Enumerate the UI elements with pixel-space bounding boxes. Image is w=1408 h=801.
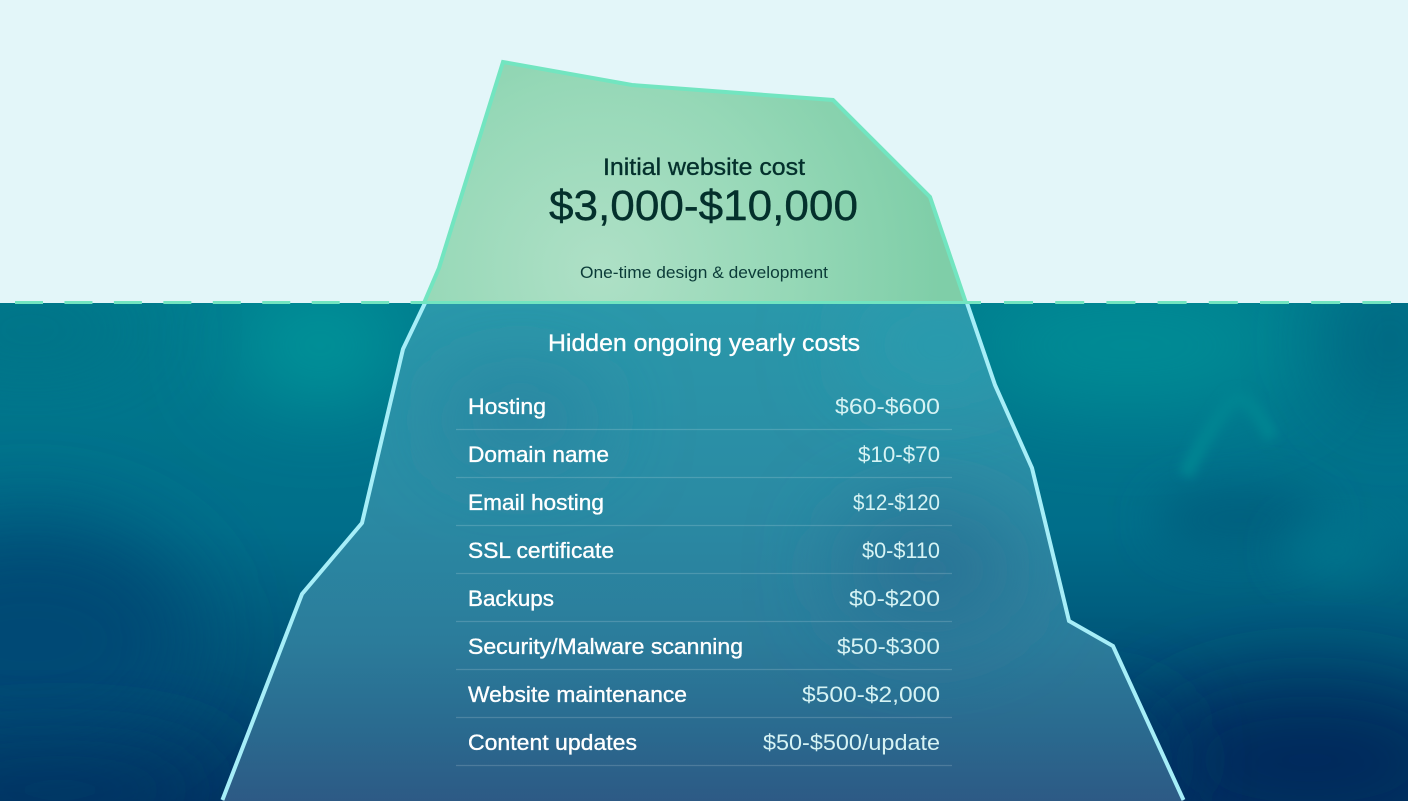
note: one-time cost: One-time design & development: [580, 263, 828, 282]
row: backups: [456, 586, 952, 622]
row: hosting: [456, 394, 952, 430]
sky background: [0, 0, 1408, 303]
row: domain name: Domain name: [468, 442, 609, 467]
iceberg: underwater section: [222, 303, 1184, 801]
row: domain name: [456, 442, 952, 478]
row: ssl certificate: [456, 538, 952, 574]
row: content updates: Content updates: [468, 730, 637, 755]
row: ssl certificate: SSL certificate: [468, 538, 614, 563]
row: security and malware scanning: [456, 634, 952, 670]
price: initial cost range: $3,000-$10,000: [549, 182, 858, 230]
row: security and malware scanning: $50-$300: [837, 634, 940, 659]
row: domain name: $10-$70: [858, 442, 940, 467]
heading: hidden costs: Hidden ongoing yearly costs: [548, 330, 860, 357]
row: website maintenance: $500-$2,000: [802, 682, 940, 707]
row: email hosting: $12-$120: [853, 490, 940, 515]
row: email hosting: Email hosting: [468, 490, 604, 515]
ocean background: [0, 270, 1408, 801]
row: website maintenance: [456, 682, 952, 718]
heading: initial website cost: Initial website cost: [603, 154, 805, 181]
row: website maintenance: Website maintenance: [468, 682, 687, 707]
waterline: [15, 301, 1391, 304]
row: security and malware scanning: Security/Malware scanning: [468, 634, 743, 659]
row: email hosting: [456, 490, 952, 526]
row: backups: Backups: [468, 586, 554, 611]
row: backups: $0-$200: [849, 586, 940, 611]
row: hosting: $60-$600: [835, 394, 940, 419]
row: content updates: [456, 730, 952, 766]
row: content updates: $50-$500/update: [763, 730, 940, 755]
iceberg: tip above water: [424, 62, 966, 303]
row: hosting: Hosting: [468, 394, 546, 419]
row: ssl certificate: $0-$110: [862, 538, 940, 563]
table: yearly costs: [456, 394, 952, 766]
